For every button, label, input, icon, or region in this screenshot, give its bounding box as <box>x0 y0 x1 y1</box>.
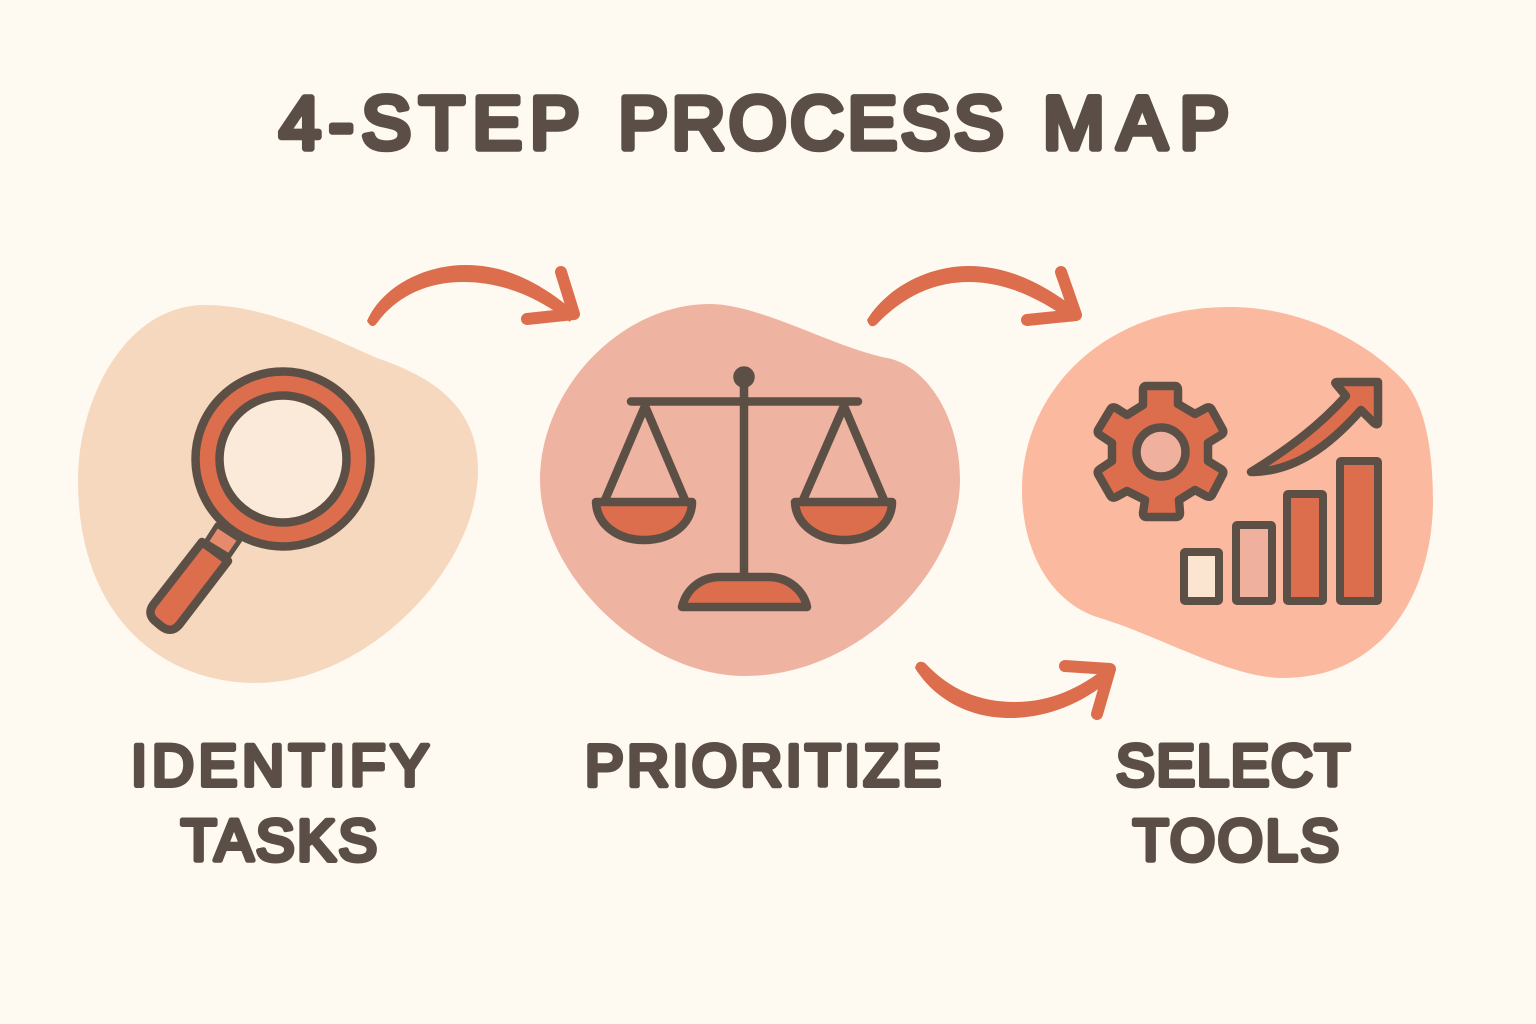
arrow: step 1 to step 2 <box>367 265 575 326</box>
blob: step 3 background <box>1022 307 1433 678</box>
icon: gear <box>1098 386 1223 517</box>
title: 4-STEP <box>280 82 580 164</box>
title: PROCESS <box>618 82 1004 164</box>
icon: growth arrow <box>1251 382 1378 472</box>
icon: bar chart <box>1184 461 1378 601</box>
icon: magnifying glass <box>150 372 370 630</box>
label: identify tasks <box>131 734 429 874</box>
icon: balance scale <box>596 370 892 607</box>
title: MAP <box>1043 82 1229 164</box>
label: select tools: TOOLS <box>1133 808 1339 874</box>
title <box>280 82 1229 164</box>
label: prioritize: PRIORITIZE <box>585 734 941 798</box>
blob: step 2 background <box>540 304 960 676</box>
arrow: step 2 to step 3 <box>867 266 1078 326</box>
label: select tools: SELECT <box>1116 734 1350 798</box>
arrow: step 2 to step 3 lower <box>915 662 1110 718</box>
label: identify tasks: IDENTIFY <box>131 734 429 798</box>
label: identify tasks: TASKS <box>181 808 377 874</box>
blob: step 1 background <box>78 305 478 683</box>
label: select tools <box>1116 734 1350 874</box>
